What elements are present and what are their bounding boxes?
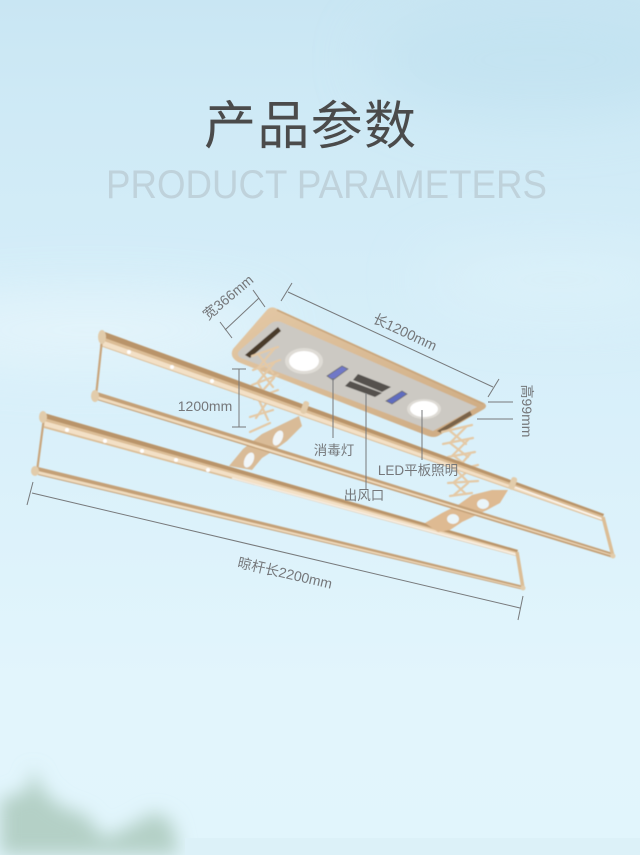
label: width: 宽366mm [200,271,256,323]
LED light left [285,348,323,374]
dimension: height 99 [477,402,513,419]
leader: air outlet [365,393,367,490]
front rails [37,413,524,590]
ceiling unit panel [232,307,486,437]
dimension: width 366 [220,290,265,338]
rail front upper [44,413,518,556]
back rails [96,331,613,558]
label: air outlet: 出风口 [344,488,384,503]
leader: LED [421,410,423,460]
end bar front left [37,418,44,471]
UV lamp left [327,366,348,380]
rail front lower [38,467,524,590]
end bar back right [603,517,613,556]
label: rod length: 晾杆长2200mm [236,554,334,592]
dimension lines and labels [27,283,523,620]
leader: UV lamp [332,378,334,438]
label: length: 长1200mm [371,310,439,354]
air outlet grille [345,374,391,397]
end bar front right [517,552,523,588]
title: 产品参数 [204,98,416,156]
subtitle: PRODUCT PARAMETERS [106,163,547,207]
LED light right [407,399,441,419]
rail back lower [97,392,613,558]
rail back upper [100,331,604,521]
product: electric drying rack [31,307,616,590]
bracket right [425,490,508,532]
UV lamp right [386,391,407,404]
dimension: rack drop 1200 [232,369,246,427]
scissor arm right [442,425,478,496]
label: UV lamp: 消毒灯 [314,443,354,458]
label: LED: LED平板照明 [378,463,458,478]
bracket left [229,416,302,470]
dimension: rod length 2200 [27,482,523,620]
vent slot left [245,327,281,358]
vent slot right [437,411,472,433]
label: height: 高99mm [519,385,535,437]
label: drop: 1200mm [178,398,232,414]
scissor arm left [250,347,280,432]
rail knobs and highlights [31,330,616,590]
end bar back left [96,340,102,396]
dimension: length 1200 [281,283,499,397]
